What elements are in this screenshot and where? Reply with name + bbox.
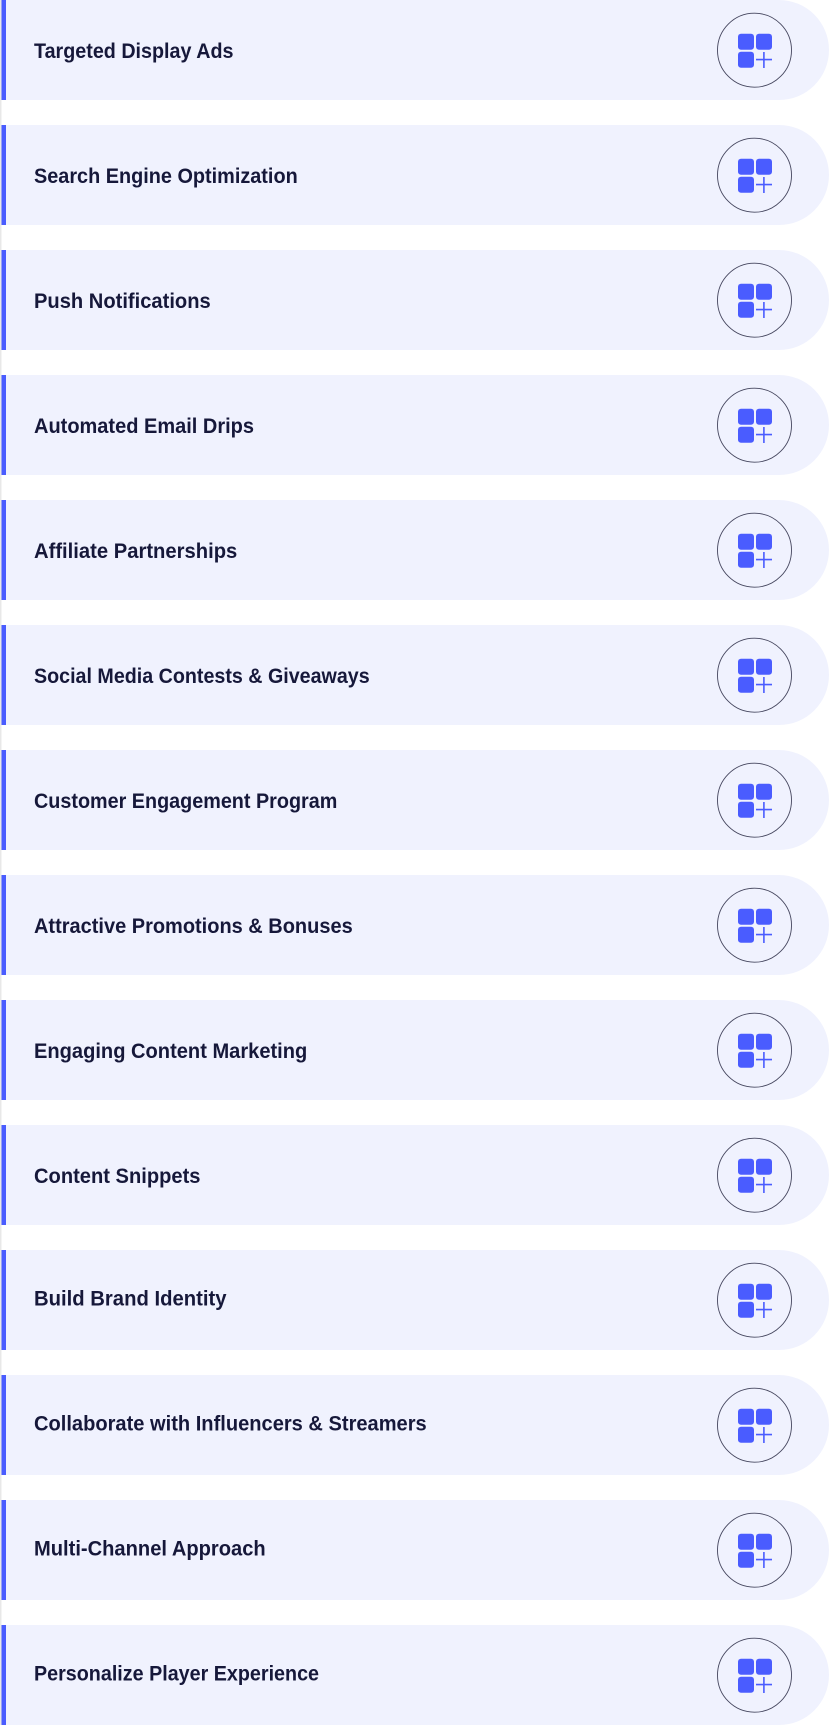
row: Build Brand Identity: Build Brand Identity (34, 1286, 227, 1310)
icon: Personalize Player Experience (718, 1638, 792, 1712)
row: Content Snippets: Content Snippets (34, 1164, 201, 1188)
row: Attractive Promotions & Bonuses: Attractive Promotions & Bonuses (34, 914, 353, 938)
icon: Targeted Display Ads (718, 13, 792, 87)
icon: Attractive Promotions & Bonuses (718, 888, 792, 962)
row: Engaging Content Marketing: Engaging Content Marketing (34, 1039, 307, 1063)
row: Multi-Channel Approach: Multi-Channel Approach (34, 1536, 266, 1560)
row: Collaborate with Influencers & Streamers (2, 1375, 829, 1475)
icon: Social Media Contests & Giveaways (718, 638, 792, 712)
row: Customer Engagement Program (2, 750, 829, 850)
icon: Engaging Content Marketing (718, 1013, 792, 1087)
row: Push Notifications: Push Notifications (34, 289, 211, 313)
icon: Customer Engagement Program (718, 763, 792, 837)
row: Personalize Player Experience: Personalize Player Experience (34, 1662, 319, 1686)
icon: Collaborate with Influencers & Streamers (718, 1388, 792, 1462)
row: Targeted Display Ads (2, 0, 829, 100)
row: Social Media Contests & Giveaways: Social Media Contests & Giveaways (34, 664, 370, 688)
row: Automated Email Drips (2, 375, 829, 475)
row: Collaborate with Influencers & Streamers: Collaborate with Influencers & Streamers (34, 1412, 427, 1436)
icon: Multi-Channel Approach (718, 1513, 792, 1587)
row: Affiliate Partnerships (2, 500, 829, 600)
row: Customer Engagement Program: Customer Engagement Program (34, 789, 337, 813)
row: Attractive Promotions & Bonuses (2, 875, 829, 975)
icon: Search Engine Optimization (718, 138, 792, 212)
row: Push Notifications (2, 250, 829, 350)
row: Content Snippets (2, 1125, 829, 1225)
icon: Affiliate Partnerships (718, 513, 792, 587)
icon: Build Brand Identity (718, 1263, 792, 1337)
row: Targeted Display Ads: Targeted Display Ads (34, 39, 234, 63)
row: Search Engine Optimization: Search Engine Optimization (34, 164, 298, 188)
row: Build Brand Identity (2, 1250, 829, 1350)
icon: Content Snippets (718, 1138, 792, 1212)
icon: Automated Email Drips (718, 388, 792, 462)
row: Engaging Content Marketing (2, 1000, 829, 1100)
row: Social Media Contests & Giveaways (2, 625, 829, 725)
row: Affiliate Partnerships: Affiliate Partnerships (34, 539, 237, 563)
row: Automated Email Drips: Automated Email Drips (34, 414, 254, 438)
row: Multi-Channel Approach (2, 1500, 829, 1600)
row: Personalize Player Experience (2, 1625, 829, 1725)
icon: Push Notifications (718, 263, 792, 337)
row: Search Engine Optimization (2, 125, 829, 225)
